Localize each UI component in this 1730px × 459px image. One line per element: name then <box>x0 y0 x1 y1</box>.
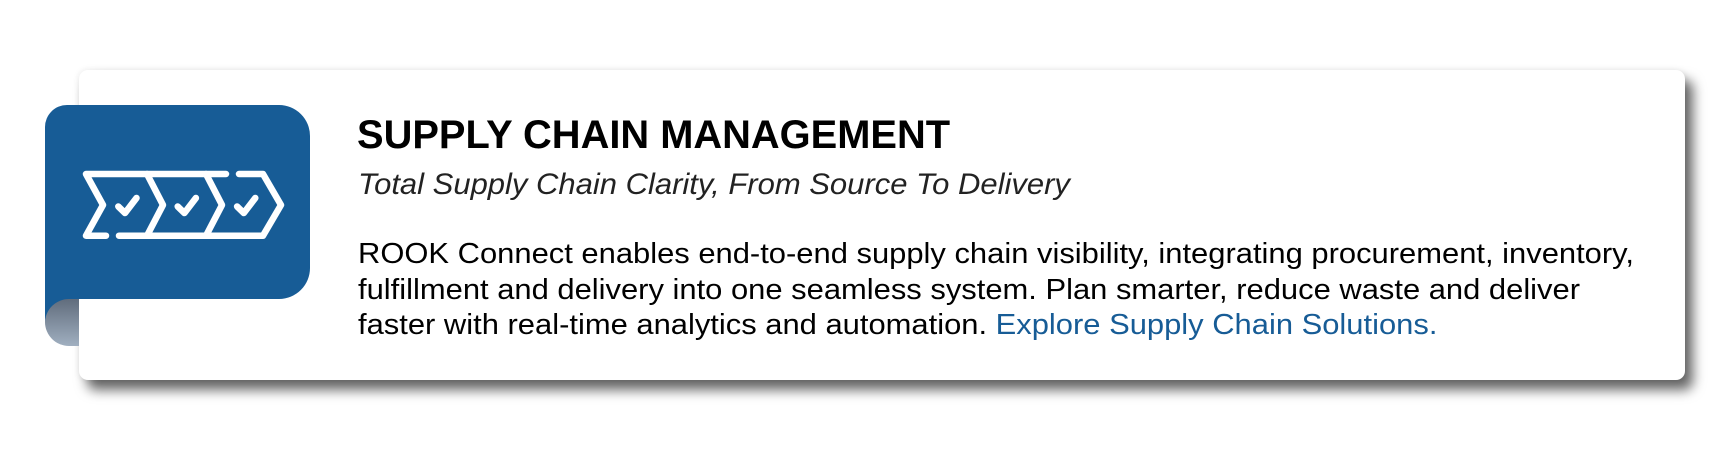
panel: supply chain management card <box>79 70 1685 380</box>
subtitle: Total Supply Chain Clarity, From Source To Delivery <box>358 168 1070 201</box>
body text: ROOK Connect enables end-to-end supply chain visibility, integrating procurement, inventory, <box>358 238 1634 270</box>
icon: blue ribbon tab with process chevrons <box>45 105 310 346</box>
body text: fulfillment and delivery into one seamless system. Plan smarter, reduce waste and deliver <box>358 274 1580 306</box>
heading: SUPPLY CHAIN MANAGEMENT <box>357 113 950 157</box>
body text <box>358 238 1634 341</box>
body text: faster with real-time analytics and automation. Explore Supply Chain Solutions. <box>358 309 1437 341</box>
